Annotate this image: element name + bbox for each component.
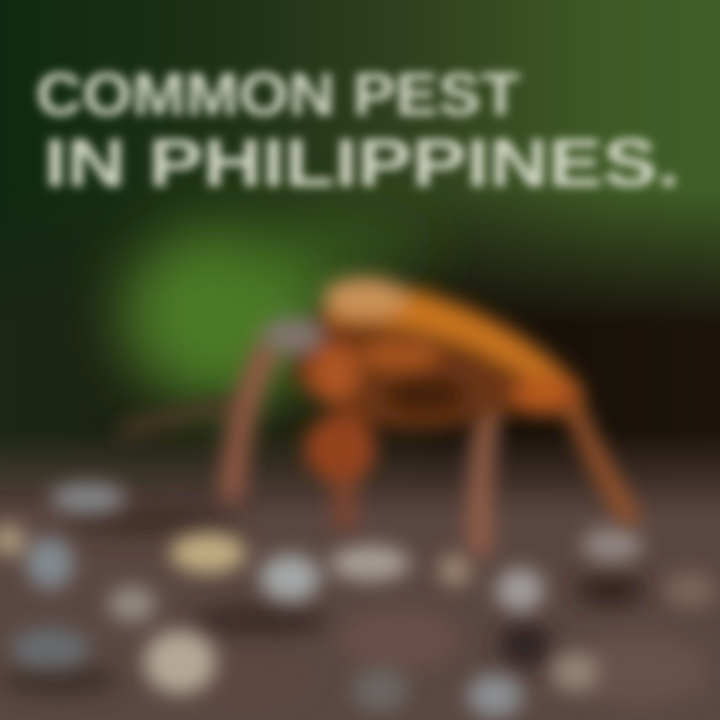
- background: forest and dark band: [0, 0, 720, 484]
- green foliage glow: [120, 217, 430, 405]
- ground tone patches: [0, 504, 710, 706]
- title line 1: COMMON PEST: [36, 61, 520, 128]
- pebbles: [0, 483, 716, 718]
- insect body: [262, 277, 585, 482]
- title line 2: IN PHILIPPINES.: [44, 125, 680, 201]
- insect: [125, 277, 628, 545]
- title: [36, 61, 680, 201]
- insect legs: [125, 350, 628, 545]
- gravel ground: [0, 430, 720, 720]
